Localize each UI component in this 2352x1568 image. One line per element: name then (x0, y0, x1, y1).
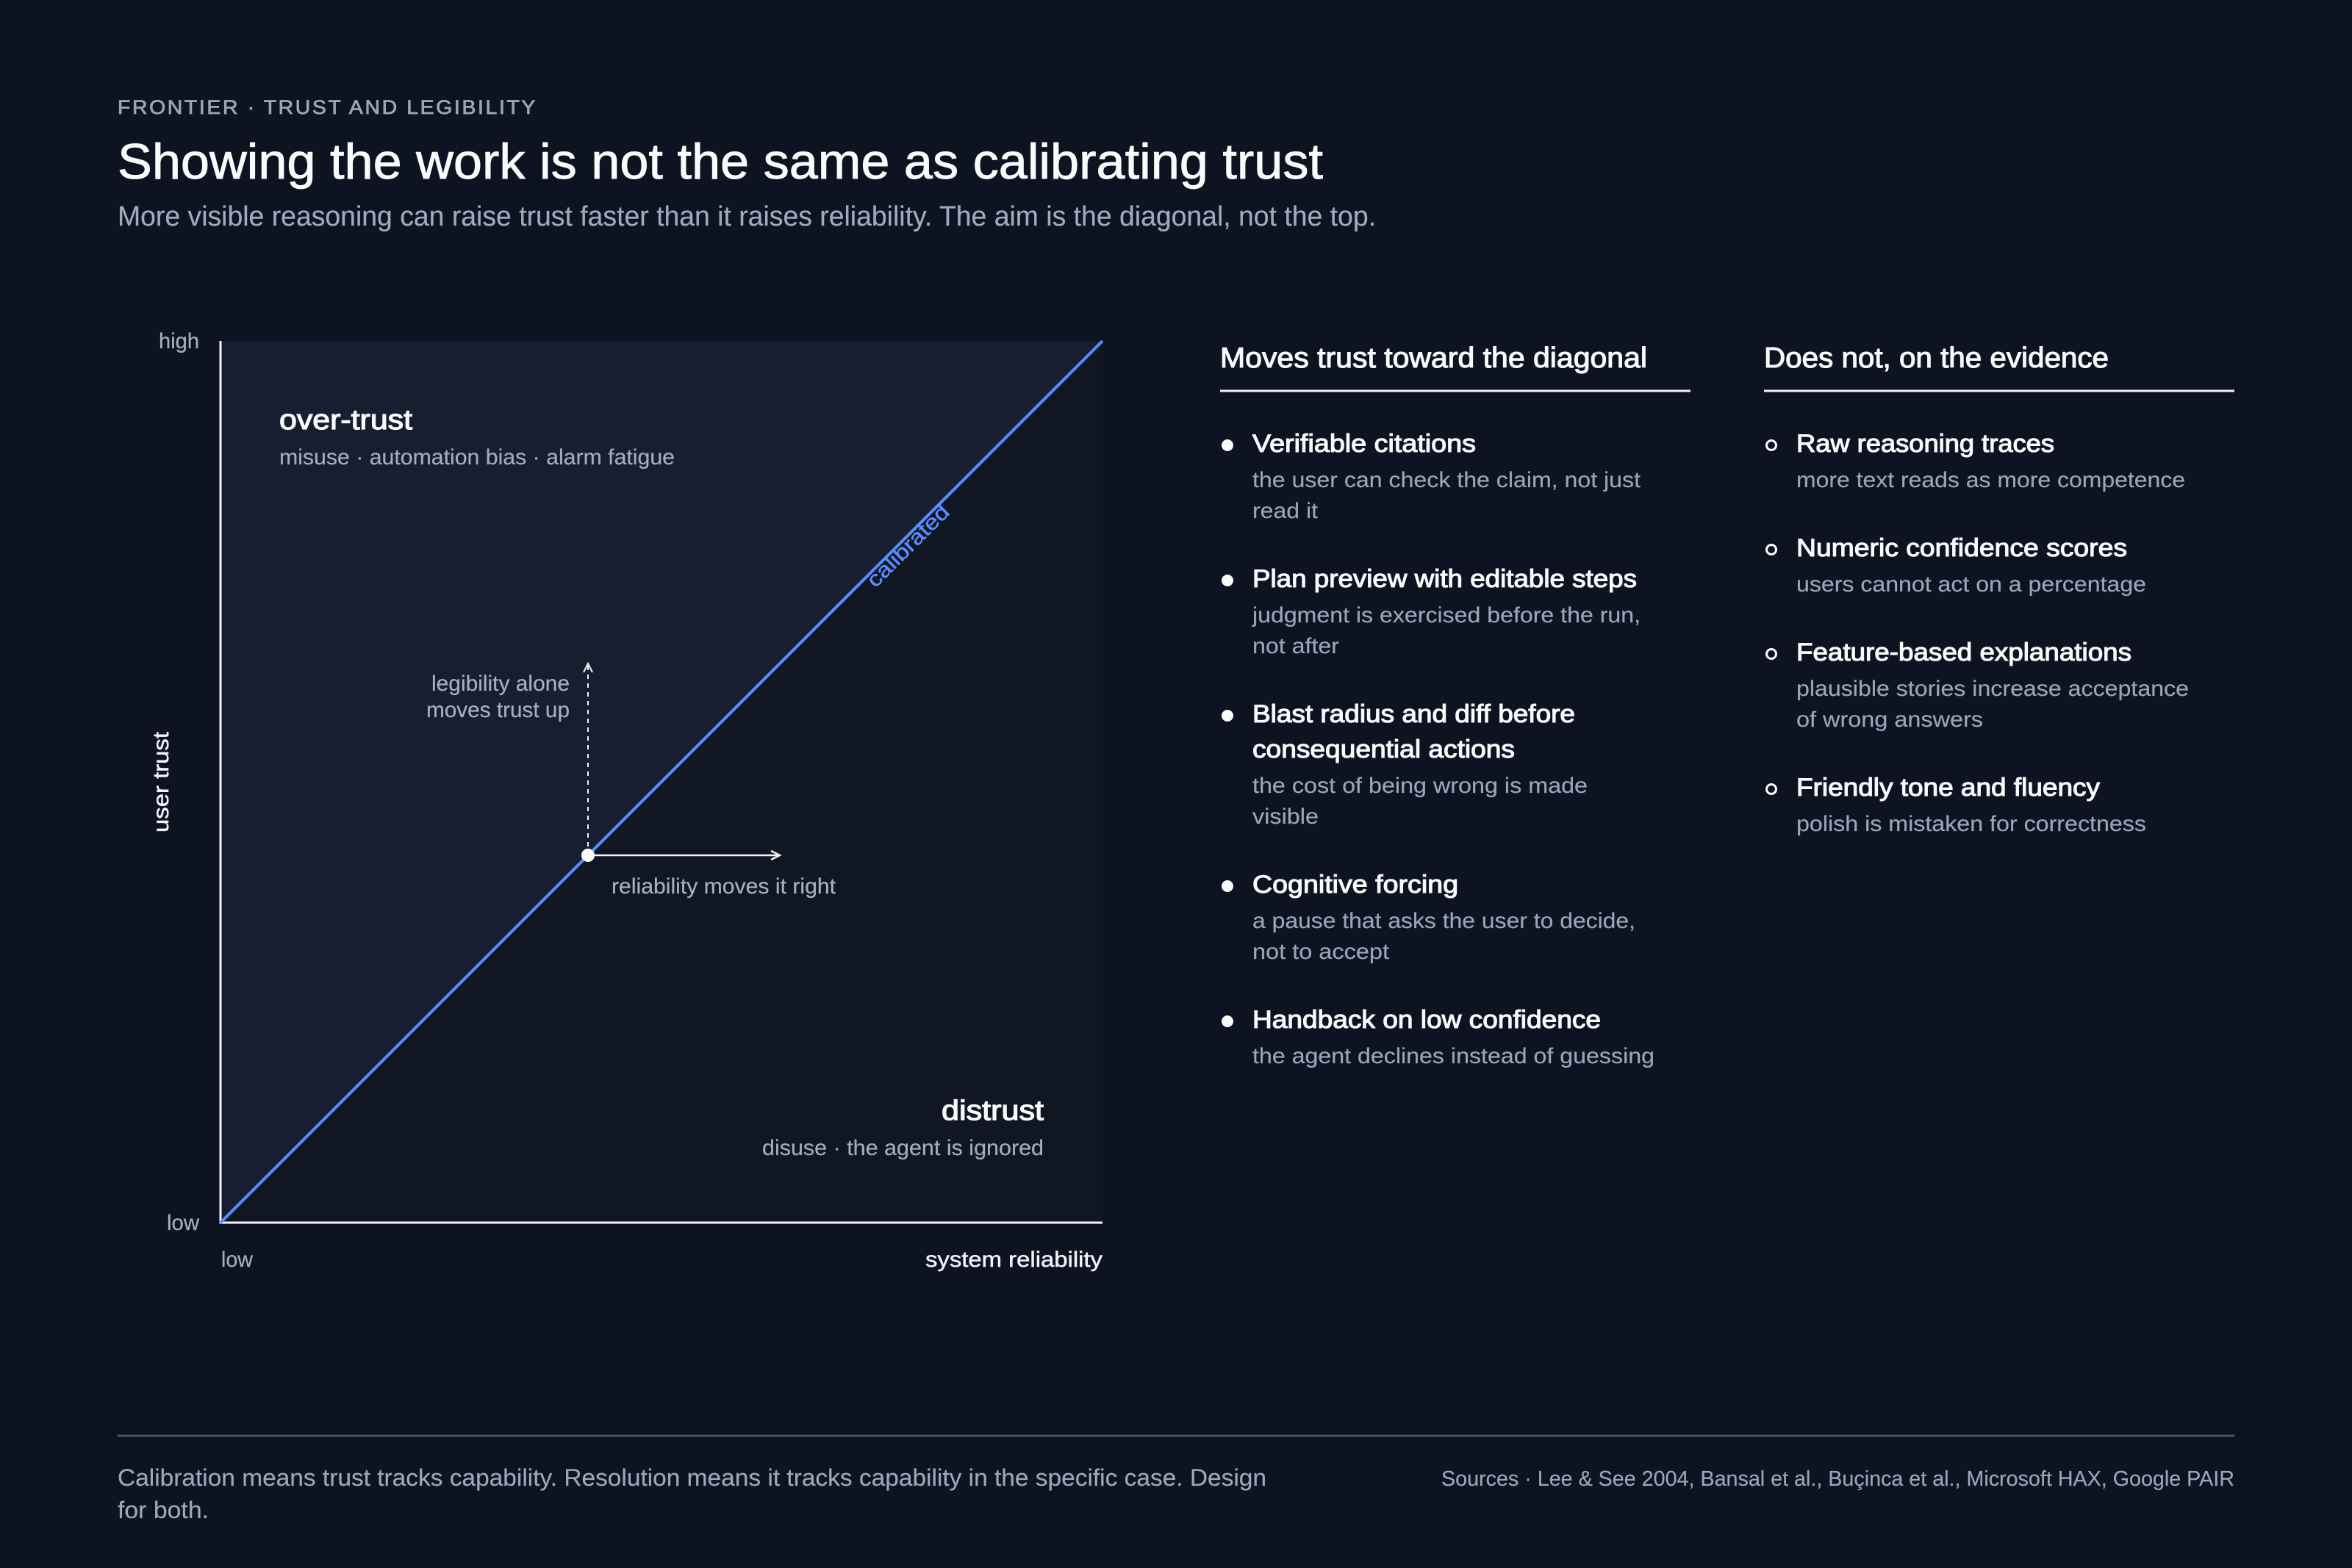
item: feature-based explanations: of wrong answers (1796, 708, 1983, 732)
item: blast radius: the cost of being wrong is made (1252, 774, 1588, 798)
item: verifiable citations: Verifiable citations (1252, 430, 1476, 458)
legibility label (426, 672, 570, 722)
item: cognitive forcing: Cognitive forcing (1252, 871, 1458, 899)
panel: moves trust toward the diagonal (1220, 342, 1690, 1068)
footer (118, 1436, 2234, 1523)
item: plan preview: Plan preview with editable steps (1252, 565, 1637, 593)
item: raw reasoning traces: more text reads as more competence (1796, 468, 2185, 492)
item: handback: the agent declines instead of guessing (1252, 1044, 1654, 1068)
sources: Sources · Lee & See 2004, Bansal et al., Buçinca et al., Microsoft HAX, Google PAIR (1441, 1467, 2234, 1491)
item: verifiable citations (1222, 430, 1641, 523)
chart: trust vs reliability (149, 329, 1102, 1272)
arrow: legibility up (584, 663, 592, 855)
column heading: Moves trust toward the diagonal (1220, 342, 1647, 374)
item: blast radius: consequential actions (1252, 736, 1515, 763)
column heading: Does not, on the evidence (1764, 342, 2109, 374)
over-trust label: misuse · automation bias · alarm fatigue (279, 445, 675, 470)
item: blast radius: visible (1252, 805, 1319, 829)
subtitle: More visible reasoning can raise trust faster than it raises reliability. The aim is the diagonal, not the top. (118, 201, 1376, 232)
item: cognitive forcing (1222, 871, 1635, 964)
distrust label: disuse · the agent is ignored (762, 1136, 1044, 1160)
header (118, 96, 1376, 232)
footer note: Calibration means trust tracks capability. Resolution means it tracks capability in the specific case. Design (118, 1464, 1266, 1491)
footer note: for both. (118, 1497, 209, 1523)
item: friendly tone: polish is mistaken for correctness (1796, 812, 2146, 836)
axis title: system reliability: system reliability (925, 1248, 1102, 1272)
calibrated diagonal (220, 341, 1102, 1223)
item: cognitive forcing: not to accept (1252, 940, 1390, 964)
item: plan preview: judgment is exercised before the run, (1252, 603, 1641, 627)
item: friendly tone (1767, 774, 2146, 836)
point (581, 849, 595, 862)
reliability label: reliability moves it right (612, 874, 836, 899)
footer note (118, 1464, 1266, 1523)
item: handback: Handback on low confidence (1252, 1006, 1601, 1034)
panel: does not, on the evidence (1764, 342, 2234, 836)
over-trust label: over-trust (279, 405, 412, 436)
item: feature-based explanations: plausible stories increase acceptance (1796, 677, 2189, 701)
over-trust region (220, 341, 1102, 1223)
item: verifiable citations: the user can check the claim, not just (1252, 468, 1641, 492)
axis tick: low x: low (221, 1248, 254, 1272)
item: plan preview: not after (1252, 634, 1339, 658)
legibility label: moves trust up (426, 698, 570, 722)
title: Showing the work is not the same as calibrating trust (118, 134, 1323, 190)
plot background (220, 341, 1102, 1223)
item: feature-based explanations (1767, 639, 2189, 732)
over-trust label (279, 405, 675, 470)
eyebrow: FRONTIER · TRUST AND LEGIBILITY (118, 96, 537, 118)
distrust label (762, 1096, 1044, 1160)
item: verifiable citations: read it (1252, 499, 1319, 523)
item: numeric confidence scores: users cannot act on a percentage (1796, 572, 2146, 597)
item: numeric confidence scores: Numeric confidence scores (1796, 534, 2127, 562)
label: calibrated: calibrated (862, 500, 954, 592)
item: plan preview (1222, 565, 1641, 658)
item: raw reasoning traces (1767, 430, 2185, 492)
item: feature-based explanations: Feature-based explanations (1796, 639, 2132, 666)
axis title: user trust: user trust (149, 731, 173, 832)
item: numeric confidence scores (1767, 534, 2146, 597)
legibility label: legibility alone (431, 672, 570, 696)
item: friendly tone: Friendly tone and fluency (1796, 774, 2100, 802)
item: blast radius (1222, 700, 1588, 829)
item: cognitive forcing: a pause that asks the user to decide, (1252, 909, 1635, 933)
distrust label: distrust (942, 1096, 1044, 1126)
axis tick: low y: low (167, 1211, 200, 1235)
axes (220, 341, 1102, 1223)
item: handback (1222, 1006, 1654, 1068)
item: raw reasoning traces: Raw reasoning traces (1796, 430, 2054, 458)
item: blast radius: Blast radius and diff before (1252, 700, 1575, 728)
axis tick: high: high (159, 329, 199, 353)
arrow: reliability right (588, 851, 780, 860)
